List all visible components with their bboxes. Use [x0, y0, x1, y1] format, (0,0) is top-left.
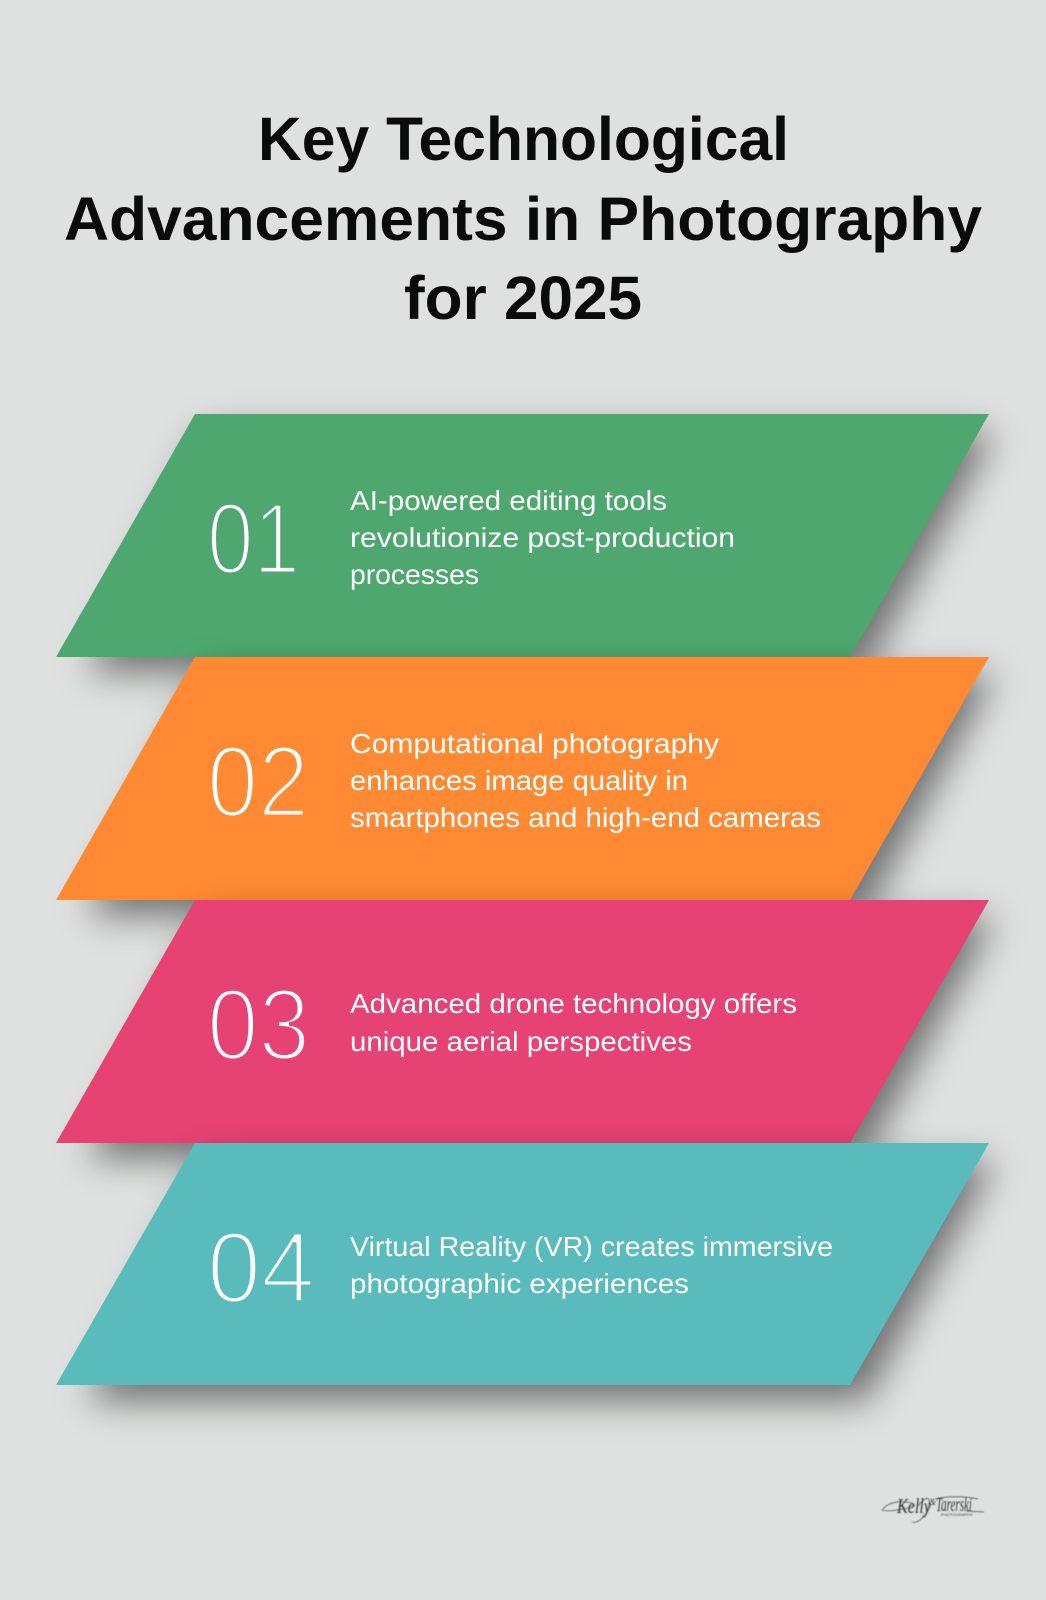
title: for 2025 [404, 264, 642, 332]
text: step 01: revolutionize post-production [350, 522, 735, 553]
panel: step 01 [56, 414, 994, 672]
title: Key Technological [258, 105, 789, 173]
text: step 02: enhances image quality in [350, 765, 688, 796]
title [64, 105, 982, 332]
number 03: 03 [207, 968, 310, 1082]
text: step 01 [350, 485, 735, 590]
text: step 02: Computational photography [350, 728, 719, 759]
text: step 01: processes [350, 559, 479, 590]
text: step 03: Advanced drone technology offers [350, 988, 797, 1019]
number 02: 02 [207, 724, 309, 838]
text: step 03: unique aerial perspectives [350, 1026, 692, 1057]
logo signature [882, 1494, 984, 1522]
text: step 04: photographic experiences [350, 1268, 689, 1299]
number 01: 01 [207, 482, 300, 596]
text: step 02 [350, 728, 821, 833]
text: step 04: Virtual Reality (VR) creates immersive [350, 1231, 833, 1262]
panel: step 02 [56, 657, 994, 915]
logo signature: PHOTOGRAPHY [941, 1513, 974, 1517]
title: Advancements in Photography [64, 185, 982, 253]
text: step 02: smartphones and high-end cameras [350, 802, 821, 833]
logo signature: Tarerski [936, 1494, 972, 1516]
logo signature: & [929, 1497, 936, 1507]
number 04: 04 [207, 1210, 315, 1324]
panel: step 04 [56, 1143, 994, 1401]
panel: step 03 [56, 900, 994, 1158]
text: step 04 [350, 1231, 833, 1299]
text: step 01: AI-powered editing tools [350, 485, 667, 516]
logo signature: Kelly [896, 1494, 932, 1518]
text: step 03 [350, 988, 797, 1057]
